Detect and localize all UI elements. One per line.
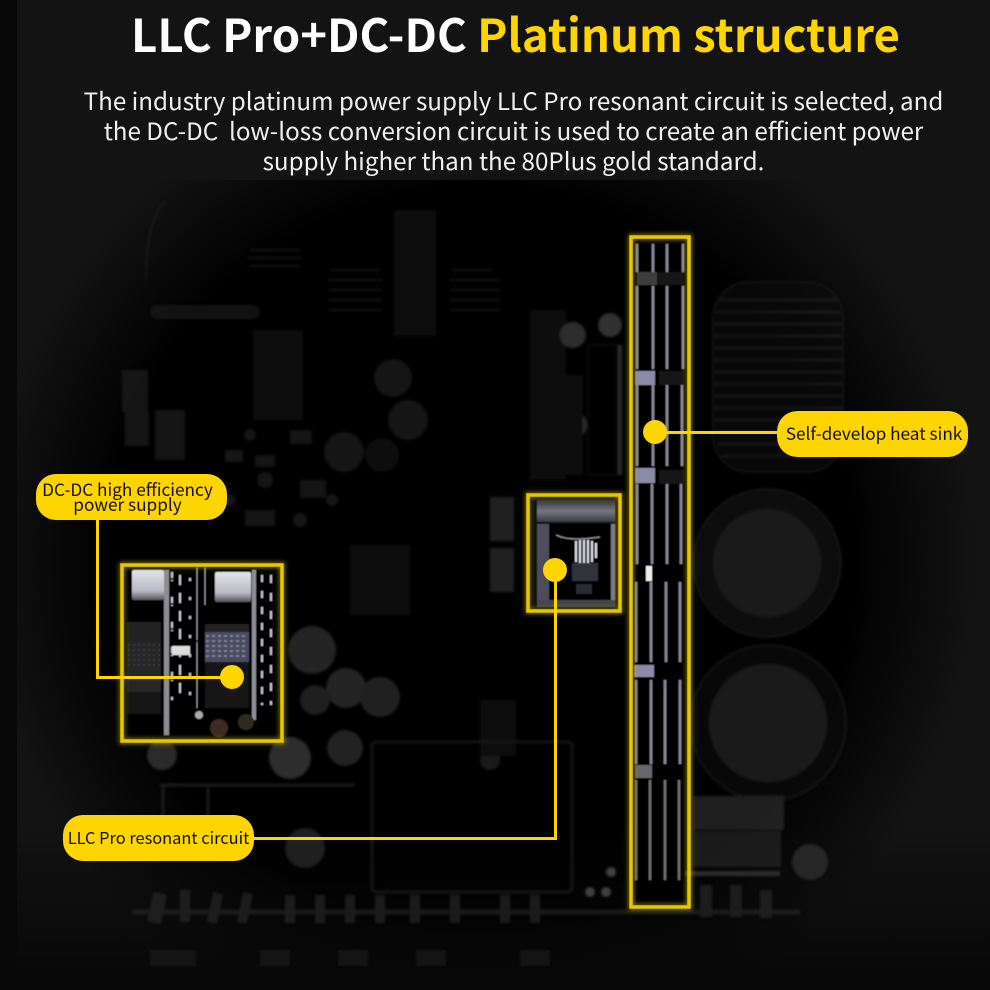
intro text: the DC-DC low-loss conversion circuit is used to create an efficient power: [104, 112, 923, 147]
capacitor tops: [693, 489, 841, 637]
highlight box: DC-DC module: [122, 565, 282, 741]
lower component row: [147, 885, 772, 966]
upper coils: [146, 200, 500, 310]
label: Self-develop heat sink: [777, 411, 971, 457]
highlight box: LLC Pro module: [528, 495, 620, 611]
highlight box: heat sink: [631, 237, 689, 907]
label: LLC Pro resonant circuit: LLC Pro resonant circuit: [68, 825, 249, 849]
label: DC-DC high efficiency power supply: [36, 474, 227, 520]
marker dot: heat sink: [643, 420, 667, 444]
marker dot: LLC Pro: [543, 558, 567, 582]
connector: heat sink: [655, 431, 780, 434]
connector: DC-DC: [98, 519, 232, 678]
label: LLC Pro resonant circuit: [63, 815, 254, 861]
intro text: The industry platinum power supply LLC Pro resonant circuit is selected, and: [84, 82, 943, 117]
connector: LLC Pro: [250, 570, 556, 838]
intro text: [84, 82, 943, 177]
center module: LLC Pro coil: [533, 499, 617, 607]
label: DC-DC high efficiency power supply: DC-DC high efficiency: [42, 476, 213, 501]
highlight box glow: [122, 237, 689, 907]
title: LLC Pro+DC-DC Platinum structure: [131, 0, 900, 66]
marker dot: DC-DC: [220, 665, 244, 689]
intro text: supply higher than the 80Plus gold standard.: [263, 142, 764, 177]
transformers: [693, 796, 784, 830]
left module: DC-DC: [124, 567, 279, 738]
toroid coil: [713, 282, 843, 472]
label: DC-DC high efficiency power supply: power supply: [73, 491, 182, 516]
label: Self-develop heat sink: Self-develop heat sink: [786, 420, 962, 445]
board components: [122, 310, 622, 868]
heat sink fins: [634, 242, 685, 902]
